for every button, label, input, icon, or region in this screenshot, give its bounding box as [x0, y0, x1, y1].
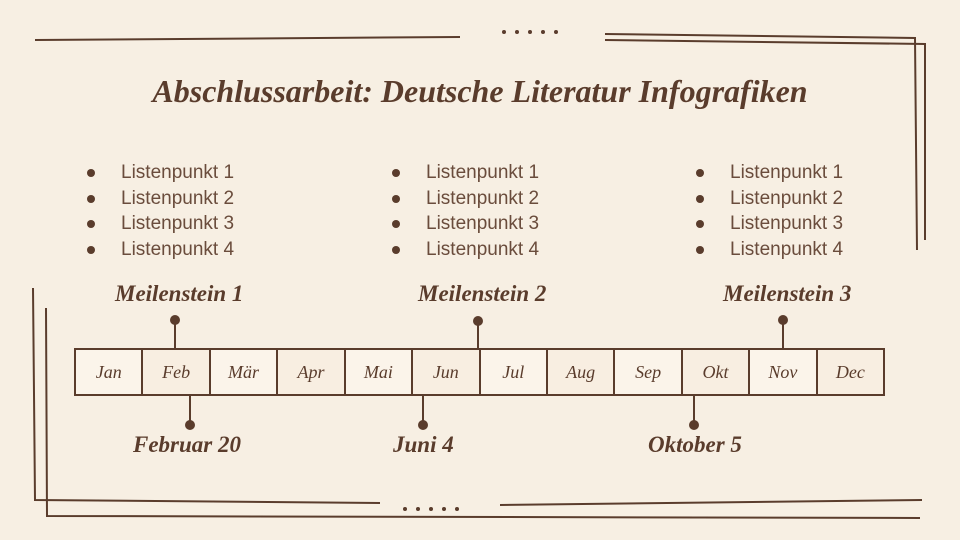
timeline: Sep — [635, 362, 661, 382]
milestone 2: Meilenstein 2 — [418, 281, 546, 306]
list column 2: Listenpunkt 4 — [426, 238, 539, 260]
list column 3: Listenpunkt 1 — [730, 162, 843, 183]
title: Abschlussarbeit: Deutsche Literatur Infografiken — [152, 73, 808, 109]
date 1: Februar 20 — [133, 432, 241, 457]
timeline: Mai — [364, 362, 393, 382]
timeline: Aug — [566, 362, 595, 382]
list column 3: Listenpunkt 2 — [730, 188, 843, 208]
timeline: Jul — [502, 362, 524, 382]
list column 2: Listenpunkt 2 — [426, 188, 539, 208]
timeline: Nov — [768, 362, 797, 382]
list column 3: Listenpunkt 4 — [730, 238, 843, 260]
list column 3: Listenpunkt 3 — [730, 213, 843, 234]
list column 2: Listenpunkt 3 — [426, 213, 539, 234]
milestone 3: Meilenstein 3 — [723, 281, 851, 306]
timeline: Apr — [297, 362, 324, 382]
timeline: Jan — [96, 362, 122, 382]
timeline: Mär — [228, 362, 259, 382]
timeline: Jun — [433, 362, 459, 382]
list column 3 — [696, 162, 843, 260]
milestone 1: Meilenstein 1 — [115, 281, 243, 306]
timeline — [74, 348, 885, 396]
date 2: Juni 4 — [393, 432, 454, 457]
list column 2: Listenpunkt 1 — [426, 162, 539, 183]
timeline: Feb — [162, 362, 190, 382]
list column 1 — [87, 162, 234, 260]
timeline: Dec — [836, 362, 865, 382]
list column 1: Listenpunkt 2 — [121, 188, 234, 208]
list column 2 — [392, 162, 539, 260]
date 3: Oktober 5 — [648, 432, 742, 457]
timeline: Okt — [702, 362, 728, 382]
list column 1: Listenpunkt 1 — [121, 162, 234, 183]
list column 1: Listenpunkt 4 — [121, 238, 234, 260]
list column 1: Listenpunkt 3 — [121, 213, 234, 234]
